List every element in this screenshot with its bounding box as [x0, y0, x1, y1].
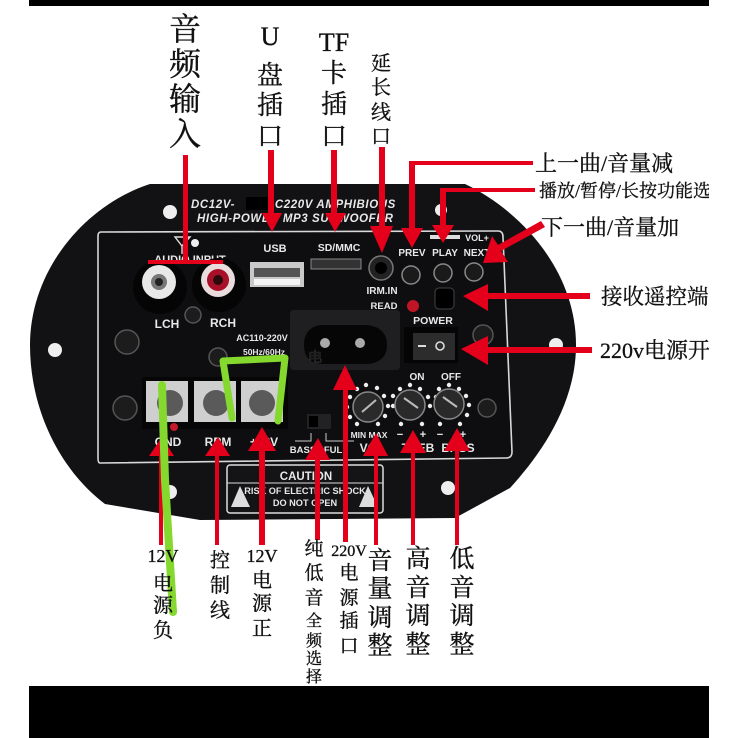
- AC voltage labels: [236, 333, 288, 357]
- board title: [191, 199, 396, 225]
- arrow: bass/full switch: [305, 438, 330, 540]
- RCA labels: RCH: [210, 316, 236, 330]
- board title: AC220V AMPHIBIOUS: [265, 199, 396, 211]
- label: TF card: [319, 28, 349, 151]
- arrow: 220V socket: [333, 365, 357, 542]
- arrow: play: [432, 188, 535, 243]
- IR extension jack: IRM.IN: [366, 286, 398, 297]
- IR receiver window: [435, 288, 454, 309]
- mounting holes: [48, 204, 563, 499]
- label: volume adjust: 调: [367, 604, 393, 632]
- screw terminals: [142, 377, 288, 431]
- label: extension port: 长: [371, 76, 391, 99]
- panel: amplifier board: [30, 184, 576, 520]
- label: extension port: 延: [371, 52, 391, 75]
- label: extension port: 口: [371, 126, 391, 148]
- board title: DC12V-: [191, 199, 235, 211]
- label: remote receiver: 接收遥控端: [601, 285, 709, 309]
- terminal labels: [155, 435, 278, 449]
- arrow: +12V: [248, 427, 276, 545]
- RCA labels: LCH: [155, 317, 179, 331]
- label: audio input: 入: [169, 116, 201, 152]
- read LED: [407, 300, 419, 312]
- knobs: TREB: [402, 441, 435, 455]
- inner frame: [98, 231, 512, 463]
- power switch: [404, 315, 458, 363]
- label: 12V positive: 正: [252, 618, 272, 640]
- label: control wire: [210, 549, 230, 622]
- AC voltage labels: AC110-220V: [236, 333, 288, 343]
- label: treble adjust: [405, 545, 431, 659]
- knobs: VOL: [360, 441, 384, 455]
- label: 12V negative: 电: [153, 572, 173, 595]
- label: extension port: 线: [371, 101, 391, 124]
- label: TF card: 插: [321, 90, 347, 119]
- USB port: [250, 243, 304, 287]
- label: treble adjust: 调: [405, 602, 431, 630]
- arrow: remote receiver: [463, 284, 590, 311]
- label: audio input: [169, 11, 202, 152]
- label: bass adjust: 低: [449, 545, 475, 573]
- label: volume adjust: 音: [367, 547, 393, 575]
- knobs: +: [460, 429, 466, 441]
- label: 220V socket: 口: [339, 636, 359, 657]
- label: TF card: TF: [319, 28, 349, 57]
- label: bass adjust: 调: [449, 602, 475, 630]
- power socket: 电: [308, 347, 322, 367]
- RCA labels: [155, 316, 236, 331]
- board title: HIGH-POWER MP3 SUBWOOFER: [197, 213, 394, 225]
- label: volume adjust: [367, 547, 393, 660]
- label: audio input: 频: [169, 46, 202, 82]
- caution box: DO NOT OPEN: [273, 498, 338, 508]
- black redaction blot: [246, 197, 268, 210]
- label: control wire: 控: [210, 549, 230, 572]
- label: 12V positive: 12V: [246, 546, 278, 566]
- bass/full switch: FULL: [324, 445, 348, 456]
- label: next track: 下一曲/音量加: [541, 215, 679, 240]
- arrow: IR jack: [370, 147, 393, 253]
- arrow: GND: [149, 437, 174, 545]
- arrow: RPM: [205, 437, 230, 545]
- control buttons: VOL+: [465, 233, 489, 243]
- label: play pause: 播放/暂停/长按功能选: [539, 181, 711, 201]
- green hand-drawn line: negative: [162, 385, 173, 612]
- arrow: previous: [401, 161, 533, 248]
- label: 220V socket: 220V: [331, 543, 367, 560]
- control buttons: NEXT: [464, 248, 490, 259]
- label: treble adjust: 高: [405, 545, 431, 573]
- control buttons: PREV: [398, 248, 426, 259]
- USB port: USB: [263, 243, 287, 255]
- label: USB drive: 盘: [257, 61, 283, 90]
- label: 220V socket: [331, 543, 367, 657]
- knobs: BASS: [441, 441, 475, 455]
- label: bass adjust: 整: [449, 631, 475, 659]
- label: 12V negative: 12V: [148, 546, 178, 566]
- label: 12V positive: 电: [252, 569, 272, 592]
- control buttons: PLAY: [432, 248, 458, 259]
- label: 12V positive: 源: [252, 592, 273, 615]
- knobs: −: [437, 429, 443, 441]
- label: subwoofer full range select: 频: [306, 632, 323, 650]
- label: USB drive: 口: [257, 122, 283, 151]
- arrow: SD: [325, 150, 346, 232]
- caution box: CAUTION: [280, 471, 332, 483]
- power switch: POWER: [413, 315, 453, 327]
- green hand-drawn bracket: [223, 358, 285, 421]
- power socket: [290, 310, 400, 370]
- RCA jack left: [133, 260, 187, 314]
- arrow: volume: [363, 433, 388, 545]
- label: subwoofer full range select: 择: [306, 668, 322, 686]
- bass/full switch: [290, 414, 354, 456]
- label: volume adjust: 整: [367, 632, 393, 660]
- RCA jack right: [192, 258, 246, 312]
- knobs: −: [397, 429, 403, 441]
- terminal labels: +12V: [250, 435, 278, 449]
- label: 220V socket: 电: [339, 562, 359, 584]
- knobs: +: [420, 429, 426, 441]
- terminal labels: GND: [155, 435, 182, 449]
- screws: [113, 307, 496, 420]
- board body: [30, 184, 576, 520]
- arrow: bass: [444, 428, 470, 545]
- arrow: next: [483, 221, 545, 263]
- red arrows: [148, 147, 592, 545]
- label: 220V socket: 插: [339, 610, 359, 632]
- label: power switch: 220v电源开: [600, 338, 710, 363]
- top black bar: [29, 0, 709, 6]
- label: treble adjust: 音: [405, 574, 431, 602]
- label: control wire: 线: [210, 599, 230, 622]
- label: subwoofer full range select: 全: [306, 612, 322, 630]
- caution box: [227, 465, 383, 513]
- label: TF card: 口: [321, 122, 347, 151]
- label: audio input: 音: [169, 11, 201, 47]
- label: subwoofer full range select: 纯: [304, 538, 324, 560]
- label: TF card: 卡: [321, 59, 347, 88]
- IR extension jack: [366, 256, 398, 312]
- label: USB drive: [257, 22, 283, 151]
- label: 12V positive: [246, 546, 278, 640]
- SD slot: SD/MMC: [318, 242, 361, 254]
- knobs: MIN MAX: [351, 430, 388, 440]
- arrow: audio input: [148, 155, 223, 264]
- IR extension jack: READ: [371, 301, 398, 312]
- label: previous track: 上一曲/音量减: [535, 151, 673, 176]
- label: extension port: [371, 52, 391, 148]
- AC voltage labels: 50Hz/60Hz: [243, 347, 285, 357]
- label: 12V negative: 负: [153, 619, 173, 642]
- knobs: OFF: [441, 372, 461, 383]
- bottom black bar: [29, 686, 709, 738]
- label: bass adjust: 音: [449, 574, 475, 602]
- label: subwoofer full range select: 低: [304, 562, 324, 584]
- caution box: RISK OF ELECTRIC SHOCK: [244, 486, 366, 496]
- label: bass adjust: [449, 545, 475, 659]
- audio input label: AUDIO INPUT: [154, 254, 226, 266]
- terminal labels: RPM: [205, 435, 231, 449]
- white mask beside the page: [709, 150, 738, 380]
- knobs: ON: [410, 372, 424, 383]
- label: subwoofer full range select: 选: [306, 650, 322, 668]
- label: 12V negative: [148, 546, 178, 642]
- label: volume adjust: 量: [367, 575, 393, 603]
- label: USB drive: 插: [257, 91, 283, 120]
- antenna icon: [175, 237, 199, 254]
- knobs: [345, 372, 475, 455]
- label: audio input: 输: [169, 81, 201, 117]
- label: subwoofer full range select: [304, 538, 324, 686]
- label: treble adjust: 整: [405, 631, 431, 659]
- label: control wire: 制: [210, 574, 230, 597]
- label: USB drive: U: [261, 22, 280, 51]
- label: 220V socket: 源: [339, 587, 359, 609]
- bass/full switch: BASS: [290, 445, 316, 456]
- label: 12V negative: 源: [153, 594, 174, 617]
- label: subwoofer full range select: 音: [304, 587, 324, 609]
- arrow: power switch: [461, 336, 592, 365]
- arrow: USB: [262, 150, 282, 232]
- control buttons: [398, 233, 490, 284]
- arrow: treble: [400, 430, 426, 545]
- SD slot: [311, 242, 361, 269]
